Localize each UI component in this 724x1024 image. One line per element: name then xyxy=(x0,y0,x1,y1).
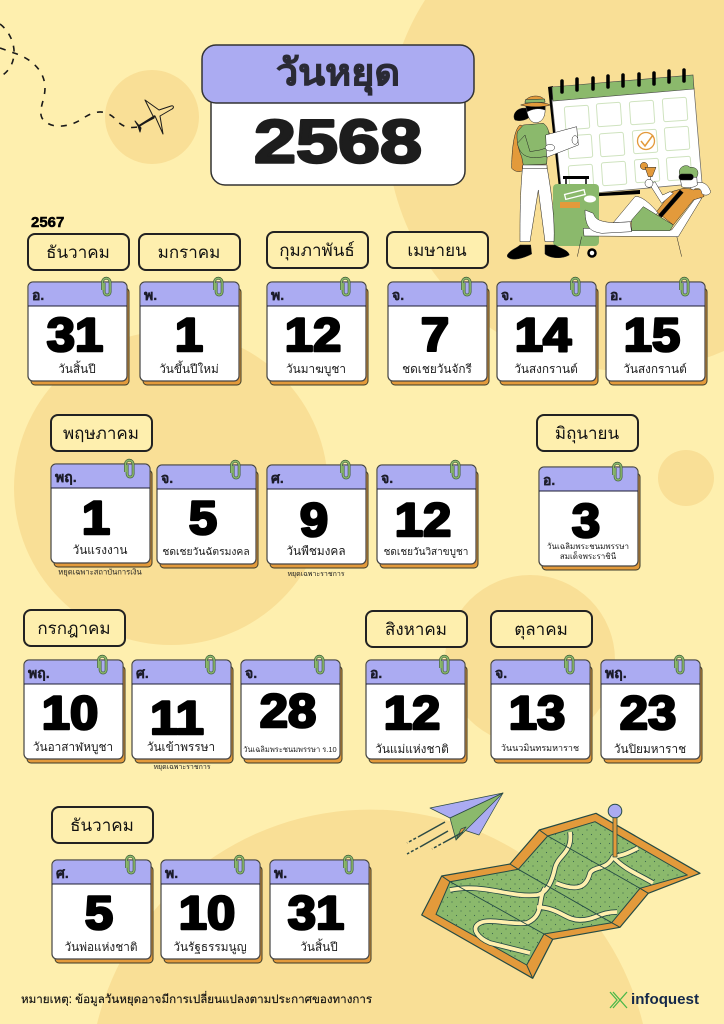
card: 1: 1 xyxy=(175,310,203,362)
card: 5 Dec: 5 xyxy=(85,888,113,940)
card: 12 May xyxy=(377,461,478,568)
card: 31: อ. xyxy=(32,287,44,303)
month: กุมภาพันธ์: กุมภาพันธ์ xyxy=(279,241,355,261)
card: 12 Aug: วันแม่แห่งชาติ xyxy=(375,742,449,756)
card: 28 July: จ. xyxy=(245,665,257,681)
card: 10 Dec xyxy=(161,856,262,963)
month: กุมภาพันธ์ xyxy=(267,232,368,268)
month: มิถุนายน: มิถุนายน xyxy=(555,424,620,444)
month: ตุลาคม xyxy=(491,611,592,647)
month: ธันวาคม: ธันวาคม xyxy=(46,243,110,262)
card: 10 Dec: วันรัฐธรรมนูญ xyxy=(173,940,247,955)
illustration: travellers and calendar xyxy=(507,70,711,259)
month: สิงหาคม xyxy=(366,611,467,647)
logo: infoquest: infoquest xyxy=(631,991,699,1008)
card: 15 xyxy=(606,278,707,385)
card: 23 Oct: 23 xyxy=(620,688,676,740)
suitcase xyxy=(553,176,599,256)
card: 1 May: 1 xyxy=(82,493,110,545)
month: เมษายน xyxy=(387,232,488,268)
card: 31 Dec: วันสิ้นปี xyxy=(300,938,338,954)
title: year: 2568 xyxy=(254,108,422,176)
card: 28 July: 28 xyxy=(260,686,316,738)
month: เมษายน: เมษายน xyxy=(407,241,467,260)
card: 28 July: วันเฉลิมพระชนมพรรษา ร.10 xyxy=(243,745,337,754)
card: 1 May xyxy=(51,460,152,567)
card: 3 June: อ. xyxy=(543,472,555,488)
card: 5 Dec xyxy=(52,856,153,963)
card: 11 July: 11 xyxy=(150,693,204,745)
card: 14: วันสงกรานต์ xyxy=(514,362,578,376)
card: 10 Dec: 10 xyxy=(179,888,235,940)
title: purple header xyxy=(202,45,474,103)
card: 3 June xyxy=(539,463,640,570)
note: government: หยุดเฉพาะราชการ xyxy=(153,764,211,771)
card: 31: วันสิ้นปี xyxy=(58,360,96,376)
person with map xyxy=(507,96,578,259)
note: government: หยุดเฉพาะราชการ xyxy=(287,571,345,578)
card: 9 May xyxy=(267,461,368,568)
card: 1: วันขึ้นปีใหม่ xyxy=(159,360,219,376)
card: 1: พ. xyxy=(144,287,157,303)
icon: logo mark xyxy=(610,992,627,1008)
card: 13 Oct: 13 xyxy=(509,688,565,740)
note: banks: หยุดเฉพาะสถาบันการเงิน xyxy=(58,568,142,576)
month: กรกฎาคม: กรกฎาคม xyxy=(37,619,111,638)
card: 15: อ. xyxy=(610,287,622,303)
card: 1 May: วันแรงงาน xyxy=(73,543,127,557)
card: 12 Aug: อ. xyxy=(370,665,382,681)
month: มกราคม xyxy=(139,234,240,270)
card: 7: ชดเชยวันจักรี xyxy=(402,362,472,376)
card: 13 Oct: วันนวมินทรมหาราช xyxy=(501,743,579,753)
card: 1 xyxy=(140,278,241,385)
card: 15: วันสงกรานต์ xyxy=(623,362,687,376)
card: 12 May: ชดเชยวันวิสาขบูชา xyxy=(384,547,468,558)
month: สิงหาคม: สิงหาคม xyxy=(385,620,447,639)
card: 31 xyxy=(28,278,129,385)
label: 2567: 2567 xyxy=(31,214,64,231)
card: 5 May: 5 xyxy=(189,493,217,545)
month: พฤษภาคม: พฤษภาคม xyxy=(63,424,139,443)
card: 14: จ. xyxy=(501,287,513,303)
dashed flight path xyxy=(0,24,138,127)
icon: map pin xyxy=(608,804,622,857)
card: 5 May: ชดเชยวันฉัตรมงคล xyxy=(162,546,250,558)
month: กรกฎาคม xyxy=(24,610,125,646)
card: 11 July: ศ. xyxy=(136,665,149,681)
card: 31 Dec: 31 xyxy=(288,888,344,940)
card: 9 May: 9 xyxy=(300,495,328,547)
card: 31 Dec xyxy=(270,856,371,963)
card: 7: 7 xyxy=(421,310,449,362)
card: 28 July xyxy=(241,656,342,763)
card: 7 xyxy=(388,278,489,385)
card: 14 xyxy=(497,278,598,385)
card: 7: จ. xyxy=(392,287,404,303)
title: year box xyxy=(211,90,465,185)
card: 5 Dec: วันพ่อแห่งชาติ xyxy=(65,940,137,954)
card: 11 July: วันเข้าพรรษา xyxy=(147,740,215,754)
month: พฤษภาคม xyxy=(51,415,152,451)
month: ตุลาคม: ตุลาคม xyxy=(514,620,568,640)
card: 13 Oct: จ. xyxy=(495,665,507,681)
card: 10 July: วันอาสาฬหบูชา xyxy=(33,740,113,755)
month: ธันวาคม 2568: ธันวาคม xyxy=(70,816,134,835)
card: 3 June: สมเด็จพระราชินี xyxy=(560,551,617,561)
title: heading: วันหยุด xyxy=(276,52,400,96)
card: 5 May: จ. xyxy=(161,470,173,486)
card: 12 May: 12 xyxy=(395,495,451,547)
card: 10 July: พฤ. xyxy=(28,665,50,681)
card: 10 July: 10 xyxy=(42,688,98,740)
icon: airplane xyxy=(135,100,173,134)
card: 10 Dec: พ. xyxy=(165,865,178,881)
calendar xyxy=(548,70,702,198)
month: มกราคม: มกราคม xyxy=(158,243,220,262)
card: 14: 14 xyxy=(515,310,571,362)
month: ธันวาคม xyxy=(28,234,129,270)
person on lounger xyxy=(577,162,711,257)
card: 31: 31 xyxy=(47,310,103,362)
month: มิถุนายน xyxy=(537,415,638,451)
card: 11 July xyxy=(132,656,233,763)
card: 31 Dec: พ. xyxy=(274,865,287,881)
icon: paper plane xyxy=(407,793,503,854)
month: ธันวาคม 2568 xyxy=(52,807,153,843)
card: 3 June: 3 xyxy=(572,496,600,548)
card: 12: 12 xyxy=(285,310,341,362)
card: 13 Oct xyxy=(491,656,592,763)
card: 1 May: พฤ. xyxy=(55,469,77,485)
card: 3 June: วันเฉลิมพระชนมพรรษา xyxy=(547,542,629,551)
card: 23 Oct: วันปิยมหาราช xyxy=(614,742,686,756)
card: 9 May: ศ. xyxy=(271,470,284,486)
title xyxy=(202,45,474,185)
card: 15: 15 xyxy=(624,310,680,362)
card: 12 xyxy=(267,278,368,385)
illustration: folded map xyxy=(422,804,700,978)
footnote: หมายเหตุ: ข้อมูลวันหยุดอาจมีการเปลี่ยนแปลงตามประกาศของทางการ xyxy=(21,991,372,1007)
card: 23 Oct: พฤ. xyxy=(605,665,627,681)
card: 5 Dec: ศ. xyxy=(56,865,69,881)
card: 12 Aug: 12 xyxy=(384,688,440,740)
card: 12: พ. xyxy=(271,287,284,303)
card: 12 May: จ. xyxy=(381,470,393,486)
card: 12: วันมาฆบูชา xyxy=(286,362,346,377)
card: 9 May: วันพืชมงคล xyxy=(286,544,346,558)
card: 12 Aug xyxy=(366,656,467,763)
card: 10 July xyxy=(24,656,125,763)
card: 23 Oct xyxy=(601,656,702,763)
card: 5 May xyxy=(157,461,258,568)
